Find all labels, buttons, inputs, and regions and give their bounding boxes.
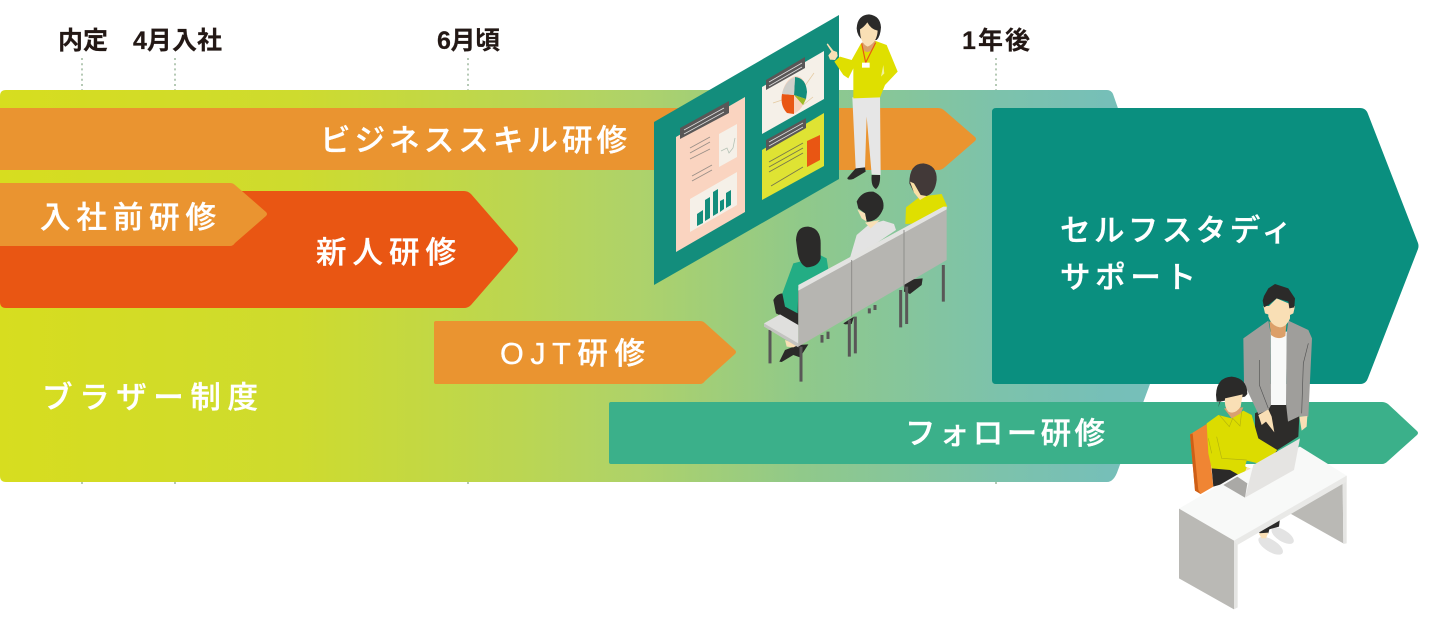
- desk: [1179, 447, 1347, 609]
- arrow: OJT training: OJT研修: [500, 337, 646, 371]
- person: man in yellow: [904, 163, 947, 294]
- arrow: business skill training: [0, 108, 976, 170]
- board panel: pink report: [676, 97, 745, 252]
- illustration: mentor and trainee at desk: [1179, 284, 1347, 609]
- timeline labels: 6月頃: [437, 27, 500, 55]
- office chair: [1190, 424, 1213, 494]
- arrow: self study support: [992, 108, 1418, 384]
- board panel: pie chart: [762, 51, 824, 134]
- bench: [764, 207, 947, 382]
- arrow: self study support: セルフスタディ: [1060, 214, 1292, 248]
- person: seated trainee: [1207, 377, 1277, 487]
- timeline labels: 4月入社: [133, 27, 222, 55]
- arrow: business skill training: ビジネススキル研修: [320, 124, 628, 158]
- arrow: self study support: サポート: [1060, 261, 1196, 295]
- illustration: presenter: [827, 14, 898, 189]
- person: woman in green: [773, 227, 828, 362]
- illustration: presentation board: [654, 15, 839, 285]
- arrow: pre-entry training: [0, 183, 267, 246]
- laptop: [1223, 438, 1300, 498]
- arrow: follow-up training: [609, 402, 1418, 464]
- arrow: OJT training: [434, 321, 736, 384]
- illustration: seated audience and bench: [764, 163, 947, 382]
- timeline tick: dotted guides: [82, 58, 996, 486]
- feet under desk: [1256, 518, 1296, 558]
- arrow: follow-up training: フォロー研修: [905, 417, 1106, 451]
- arrow: new employee training: 新人研修: [316, 236, 456, 270]
- background band: brother system: [0, 90, 1150, 482]
- person: standing mentor: [1243, 284, 1312, 461]
- arrow: new employee training: [0, 191, 518, 308]
- timeline labels: 1年後: [962, 27, 1030, 55]
- person: man in white: [843, 192, 896, 324]
- timeline labels: [58, 27, 1030, 55]
- arrow: pre-entry training: 入社前研修: [40, 201, 216, 235]
- timeline labels: 内定: [58, 27, 108, 55]
- label: brother system: ブラザー制度: [42, 381, 258, 415]
- board panel: yellow note: [762, 113, 824, 200]
